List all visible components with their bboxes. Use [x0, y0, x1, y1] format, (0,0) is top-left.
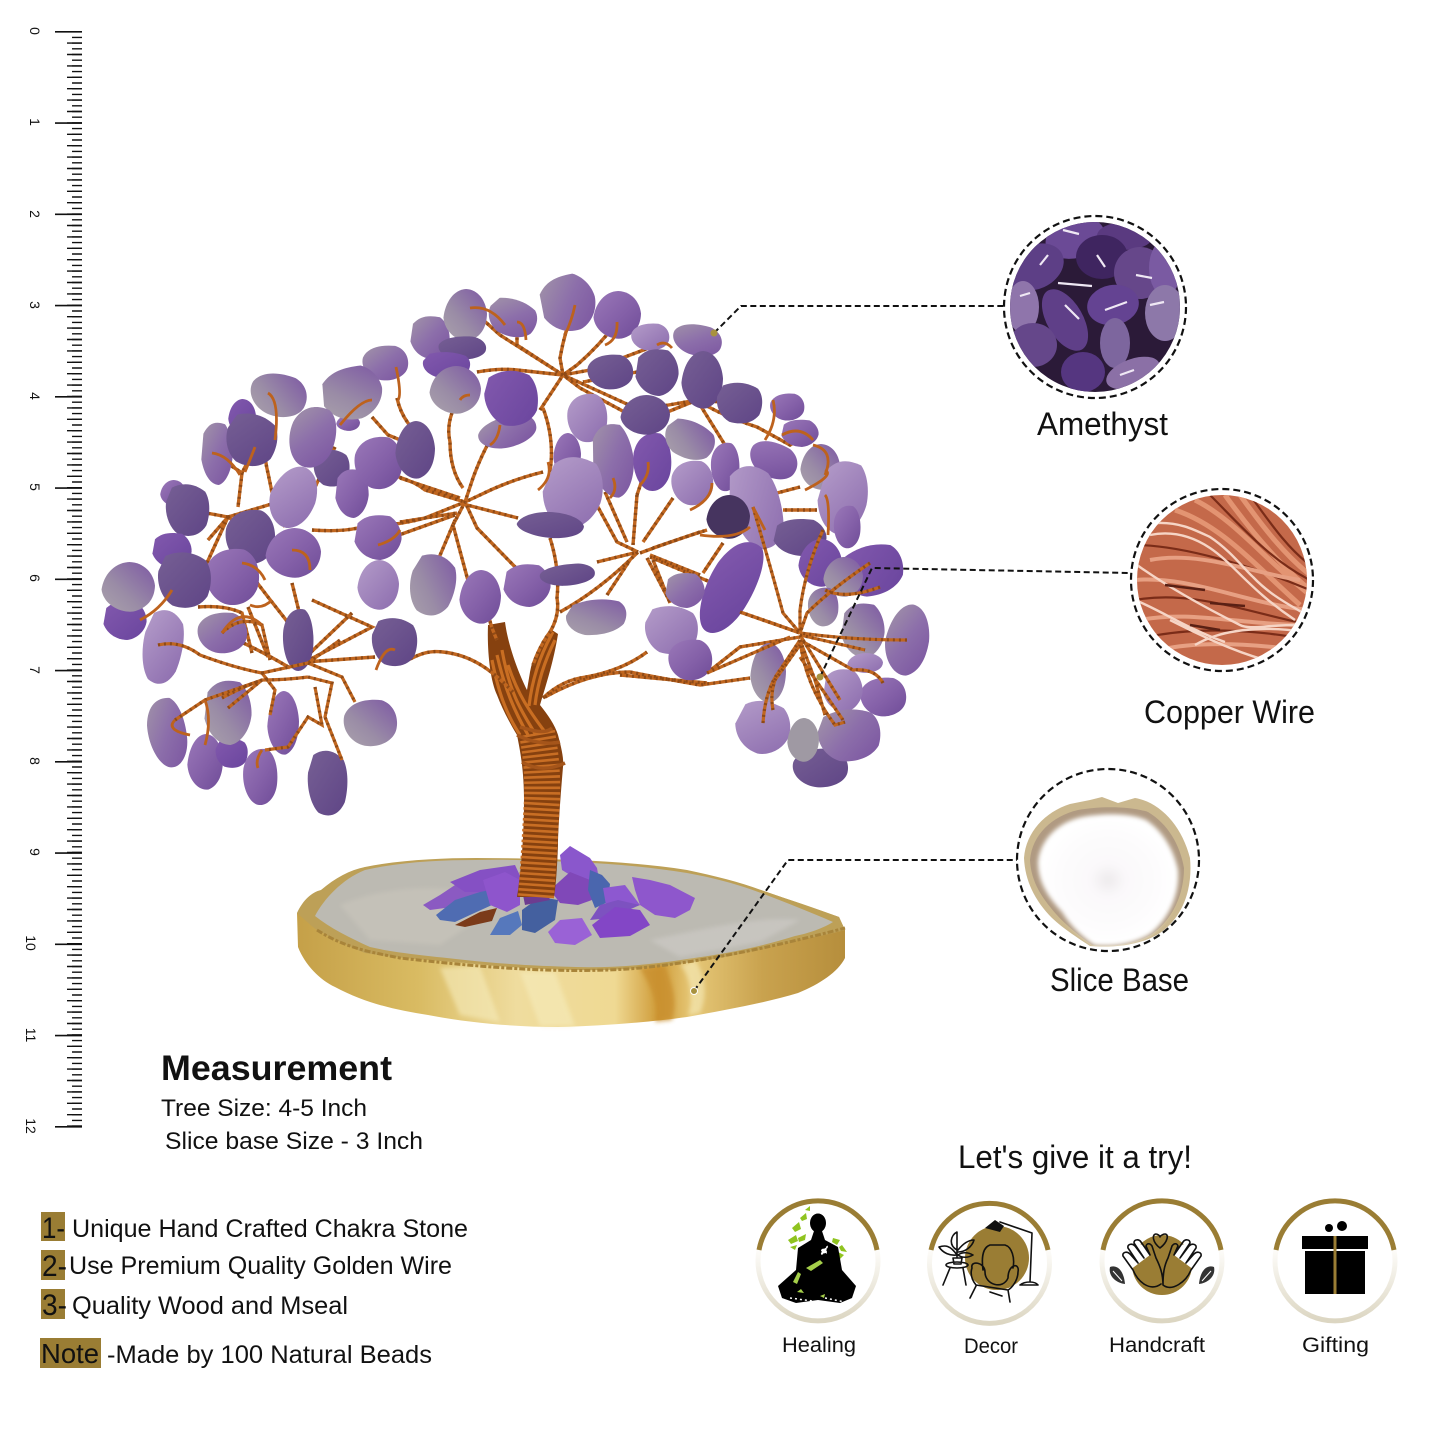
label: Copper Wire: Copper Wire [1144, 694, 1315, 730]
ruler numbers: 11 [23, 1028, 39, 1042]
measurement text block [161, 1049, 423, 1155]
ruler numbers: 7 [27, 666, 43, 674]
ruler numbers: 3 [27, 301, 43, 309]
crystal chips [423, 846, 695, 945]
agate slice base [297, 846, 845, 1027]
feature list: Unique Hand Crafted Chakra Stone [72, 1215, 468, 1243]
ruler numbers: 4 [27, 392, 43, 400]
ruler numbers: 8 [27, 757, 43, 765]
callout: slice base [690, 769, 1199, 998]
icon: handcraft [1102, 1201, 1222, 1357]
ruler numbers: 10 [23, 935, 39, 951]
icon: healing: Healing [782, 1334, 856, 1357]
icon: gifting: Gifting [1302, 1334, 1369, 1357]
icon: gifting [1275, 1201, 1395, 1357]
copper branches behind stones [190, 305, 817, 698]
feature list: Use Premium Quality Golden Wire [69, 1252, 452, 1280]
feature list: 1- [42, 1212, 65, 1245]
feature list: 3- [42, 1289, 67, 1322]
callout: amethyst [710, 211, 1186, 442]
measurement text block: Tree Size: 4-5 Inch [161, 1095, 367, 1122]
icon: decor: Decor [964, 1335, 1018, 1358]
ruler numbers: 12 [23, 1118, 39, 1134]
ruler numbers: 1 [27, 118, 43, 126]
ruler numbers: 2 [27, 210, 43, 218]
ruler numbers: 9 [27, 848, 43, 856]
measurement text block: Slice base Size - 3 Inch [165, 1128, 423, 1155]
ruler numbers: 6 [27, 574, 43, 582]
label: Amethyst: Amethyst [1037, 406, 1168, 442]
measurement text block: Measurement [161, 1049, 392, 1088]
label: Slice Base: Slice Base [1050, 962, 1189, 998]
feature list [40, 1212, 468, 1369]
tree trunk [190, 305, 817, 897]
feature list: Quality Wood and Mseal [72, 1292, 348, 1320]
callout: copper wire [816, 489, 1315, 730]
ruler numbers: 0 [27, 27, 43, 35]
ruler numbers: 5 [27, 483, 43, 491]
amethyst stones [102, 268, 934, 815]
icon: decor [929, 1203, 1050, 1358]
icon: handcraft: Handcraft [1109, 1334, 1205, 1357]
copper wires in front of stones [140, 305, 907, 768]
icon: healing [758, 1201, 878, 1357]
ruler [23, 27, 77, 1134]
feature list: -Made by 100 Natural Beads [107, 1341, 432, 1369]
ruler numbers [23, 27, 43, 1134]
feature list: Note [41, 1338, 99, 1369]
heading: let's give it a try: Let's give it a try! [958, 1139, 1192, 1175]
feature list: 2- [42, 1250, 67, 1283]
